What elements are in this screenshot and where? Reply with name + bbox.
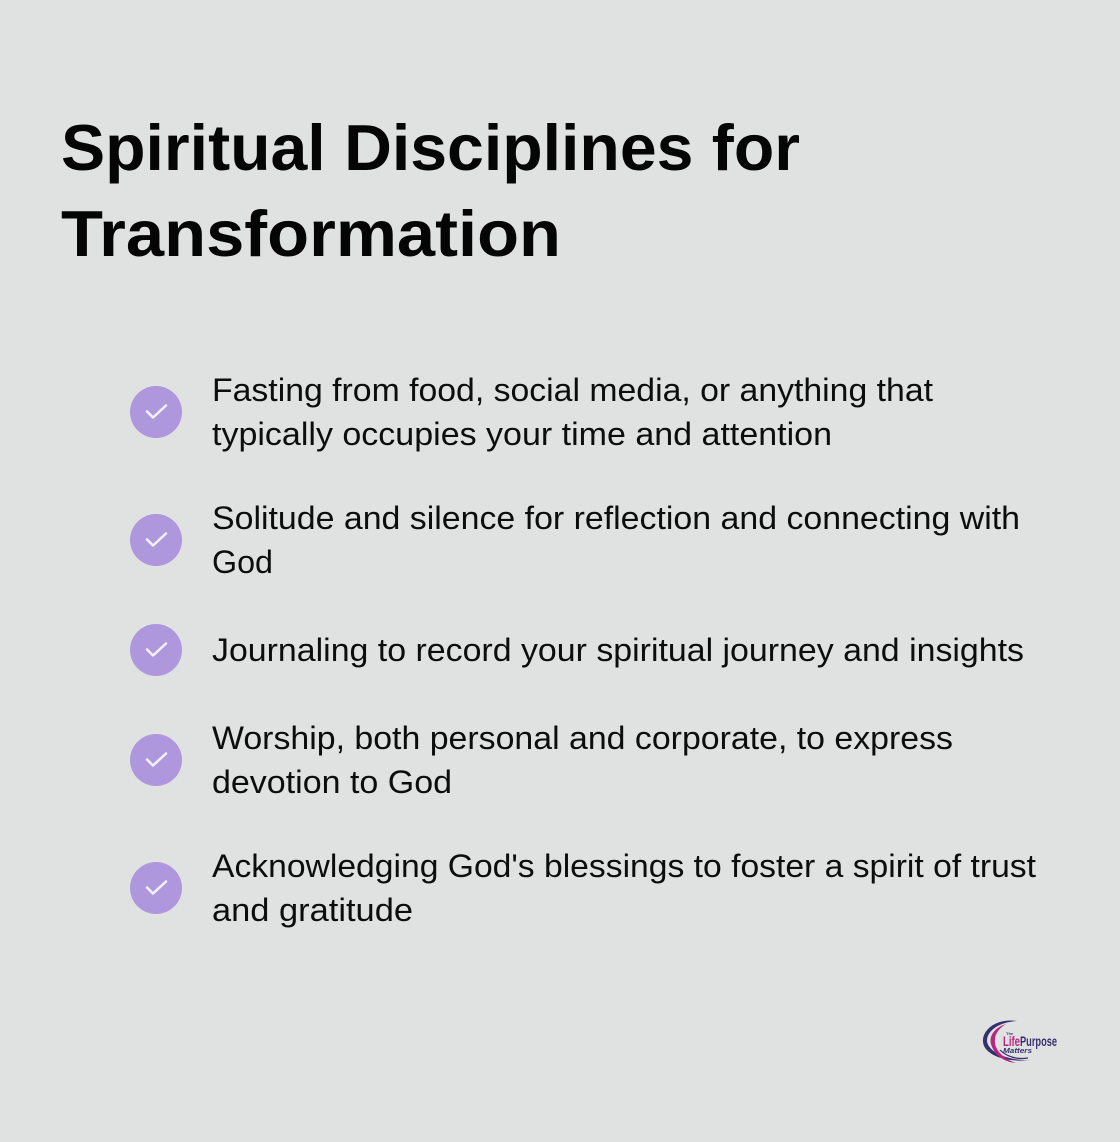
item: worship xyxy=(130,720,953,800)
title xyxy=(61,111,800,270)
icon: check badge xyxy=(130,386,182,438)
text: worship xyxy=(212,720,953,800)
text: journaling: Journaling to record your spiritual journey and insights xyxy=(212,632,1024,668)
checklist xyxy=(130,372,1036,928)
title: Spiritual Disciplines for xyxy=(61,111,800,184)
item: journaling xyxy=(130,624,1024,676)
logo: The Life Purpose Matters: Purpose xyxy=(1020,1033,1057,1049)
icon: check badge xyxy=(130,514,182,566)
text: gratitude: and gratitude xyxy=(212,892,413,928)
logo: The Life Purpose Matters xyxy=(983,1021,1057,1063)
icon: check badge xyxy=(130,862,182,914)
text: solitude: God xyxy=(212,544,273,580)
logo: The Life Purpose Matters: Matters xyxy=(1003,1048,1032,1055)
logo: The Life Purpose Matters: The xyxy=(1006,1031,1014,1036)
text: gratitude xyxy=(212,848,1036,928)
text: fasting: typically occupies your time and attention xyxy=(212,416,832,452)
logo: The Life Purpose Matters: Life xyxy=(1003,1033,1020,1049)
text: fasting: Fasting from food, social media, or anything that xyxy=(212,372,933,408)
text: worship: devotion to God xyxy=(212,764,452,800)
item: gratitude xyxy=(130,848,1036,928)
text: solitude: Solitude and silence for reflection and connecting with xyxy=(212,500,1020,536)
text: worship: Worship, both personal and corporate, to express xyxy=(212,720,953,756)
text: fasting xyxy=(212,372,933,452)
icon: check badge xyxy=(130,624,182,676)
icon: check badge xyxy=(130,734,182,786)
title: Transformation xyxy=(61,197,561,270)
text: gratitude: Acknowledging God's blessings to foster a spirit of trust xyxy=(212,848,1036,884)
item: solitude xyxy=(130,500,1020,580)
item: fasting xyxy=(130,372,933,452)
text: solitude xyxy=(212,500,1020,580)
